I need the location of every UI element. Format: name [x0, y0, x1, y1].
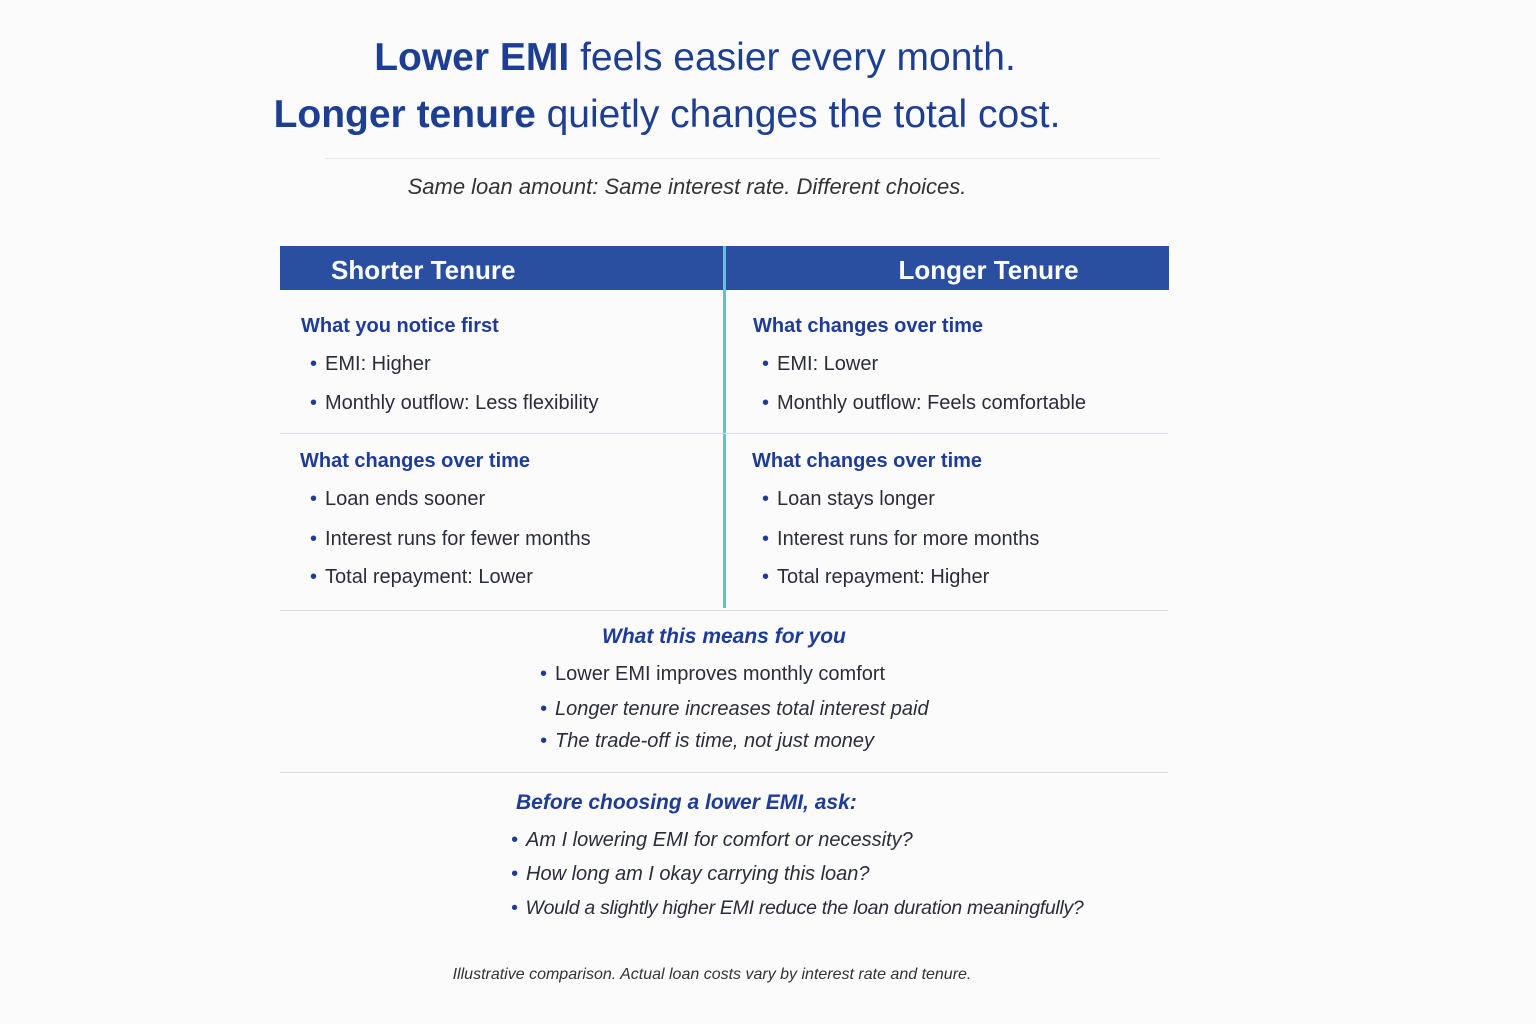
panel: shorter first: What you notice first	[301, 315, 499, 337]
panel: longer first	[753, 315, 1086, 414]
header: longer: Longer Tenure	[898, 255, 1079, 285]
panel: before choosing: How long am I okay carrying this loan?	[526, 863, 870, 885]
table header	[280, 246, 1169, 290]
panel: what this means: What this means for you	[602, 625, 846, 648]
panel: shorter over time: Total repayment: Lower	[325, 566, 533, 588]
panel: what this means: The trade-off is time, not just money	[555, 730, 874, 752]
vertical divider	[723, 246, 726, 608]
title: Lower EMI feels easier every month.	[374, 36, 1016, 79]
panel: shorter over time: Loan ends sooner	[325, 488, 485, 510]
panel: longer over time: Interest runs for more months	[777, 528, 1039, 550]
panel: shorter first	[301, 315, 598, 414]
panel: what this means	[540, 625, 930, 752]
panel: longer over time: Total repayment: Higher	[777, 566, 989, 588]
subtitle: Same loan amount: Same interest rate. Different choices.	[408, 174, 966, 199]
panel: shorter over time: Interest runs for fewer months	[325, 528, 591, 550]
footer note: Illustrative comparison. Actual loan costs vary by interest rate and tenure.	[453, 966, 971, 983]
title line 2: Longer tenure quietly changes the total cost.	[274, 93, 1060, 136]
panel: before choosing	[512, 791, 1084, 919]
panel: shorter first: Monthly outflow: Less flexibility	[325, 392, 598, 414]
panel: longer first: Monthly outflow: Feels comfortable	[777, 392, 1086, 414]
panel: longer first: What changes over time	[753, 315, 983, 337]
panel: before choosing: Would a slightly higher EMI reduce the loan duration meaningfully?	[526, 897, 1083, 919]
panel: longer over time: Loan stays longer	[777, 488, 935, 510]
panel: what this means: Lower EMI improves monthly comfort	[555, 663, 885, 685]
panel: shorter over time	[300, 450, 591, 588]
header: shorter: Shorter Tenure	[331, 255, 515, 285]
panel: longer first: EMI: Lower	[777, 353, 878, 375]
panel: before choosing: Am I lowering EMI for comfort or necessity?	[526, 829, 913, 851]
panel: shorter over time: What changes over time	[300, 450, 530, 472]
panel: shorter first: EMI: Higher	[325, 353, 431, 375]
panel: longer over time	[752, 450, 1039, 588]
panel: longer over time: What changes over time	[752, 450, 982, 472]
panel: before choosing: Before choosing a lower EMI, ask:	[516, 791, 857, 814]
panel: what this means: Longer tenure increases total interest paid	[555, 698, 929, 720]
